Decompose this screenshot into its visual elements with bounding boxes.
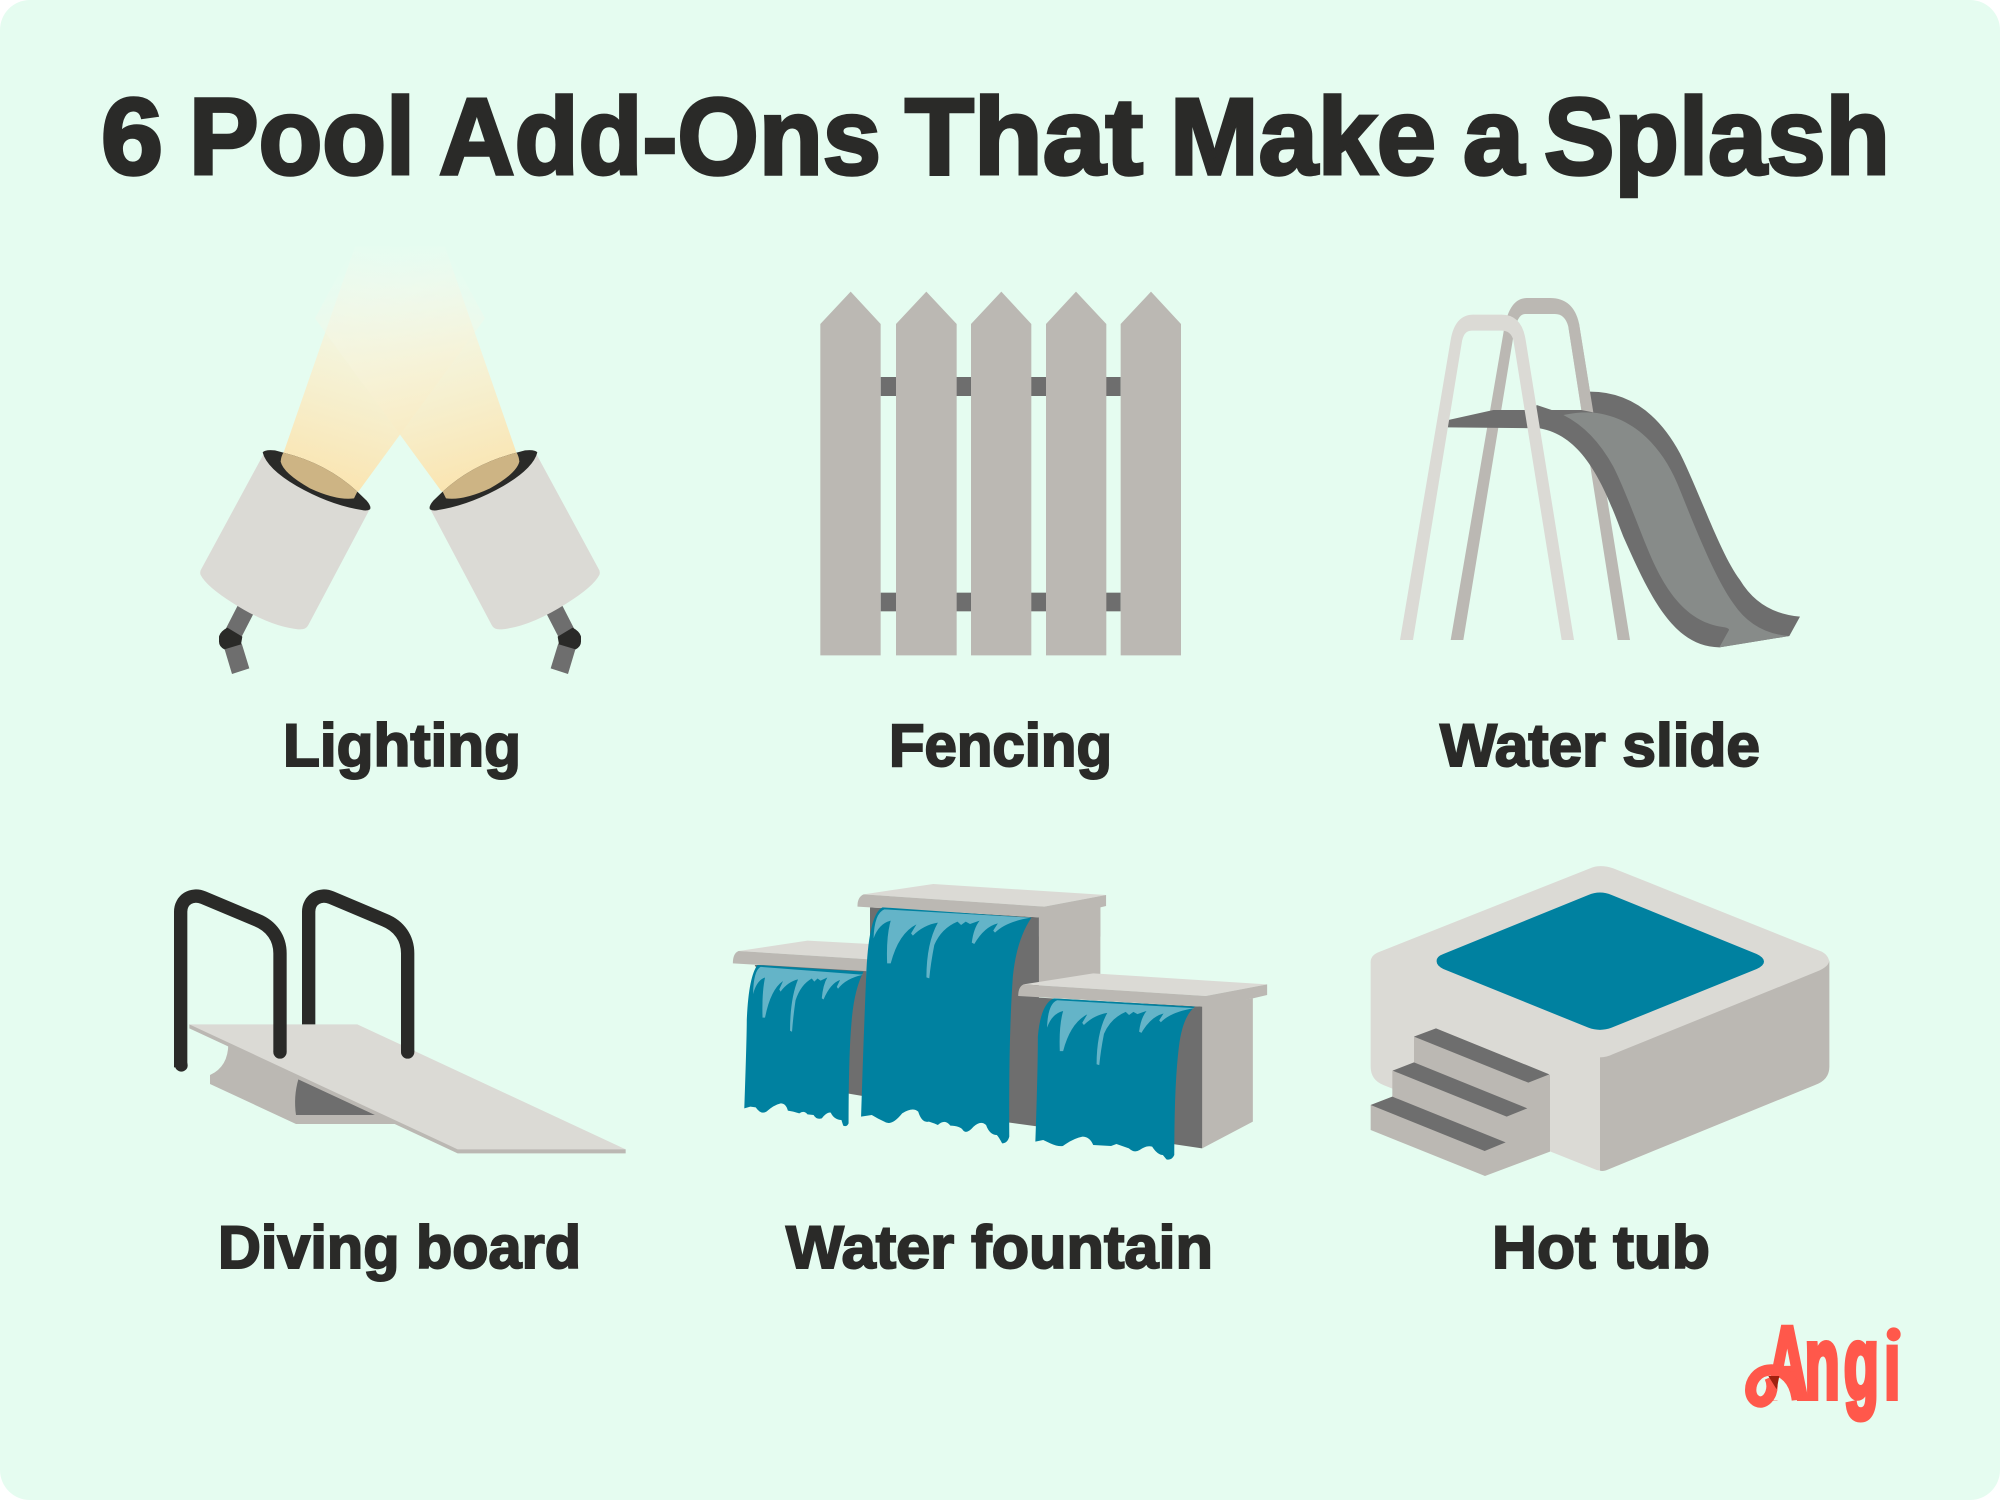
title: a (1463, 76, 1525, 198)
title: Add-Ons (439, 76, 881, 198)
label: lighting: Lighting (283, 712, 521, 779)
center basin (857, 884, 1106, 1127)
title (101, 76, 1890, 198)
label: water fountain: Water fountain (786, 1214, 1213, 1281)
logo: Angi: n (1805, 1305, 1840, 1420)
light beams (283, 247, 517, 492)
right basin (1009, 973, 1267, 1148)
icon: lighting (200, 247, 600, 674)
center waterfall (861, 907, 1031, 1143)
label: water slide: Water slide (1440, 712, 1760, 779)
title: Pool (189, 76, 415, 198)
icon: water fountain (733, 884, 1267, 1160)
label: diving board: Diving board (218, 1214, 581, 1281)
right spotlight (430, 450, 600, 674)
icon: hot tub (1371, 866, 1829, 1176)
title: That (905, 76, 1143, 198)
title: 6 (101, 76, 163, 198)
left basin (733, 941, 870, 1126)
icon: fencing (820, 292, 1181, 655)
title: Make (1170, 76, 1436, 198)
label: fencing: Fencing (889, 712, 1112, 779)
icon: water slide (1400, 298, 1800, 647)
logo: Angi: A (1767, 1305, 1808, 1420)
right waterfall (1035, 998, 1195, 1160)
title: Splash (1544, 76, 1890, 198)
logo: Angi: i (1884, 1305, 1900, 1420)
icon: diving board (175, 896, 626, 1153)
label: hot tub: Hot tub (1492, 1214, 1710, 1281)
logo: Angi: g (1844, 1305, 1879, 1420)
logo: Angi (1751, 1305, 1907, 1420)
left spotlight (200, 450, 370, 674)
